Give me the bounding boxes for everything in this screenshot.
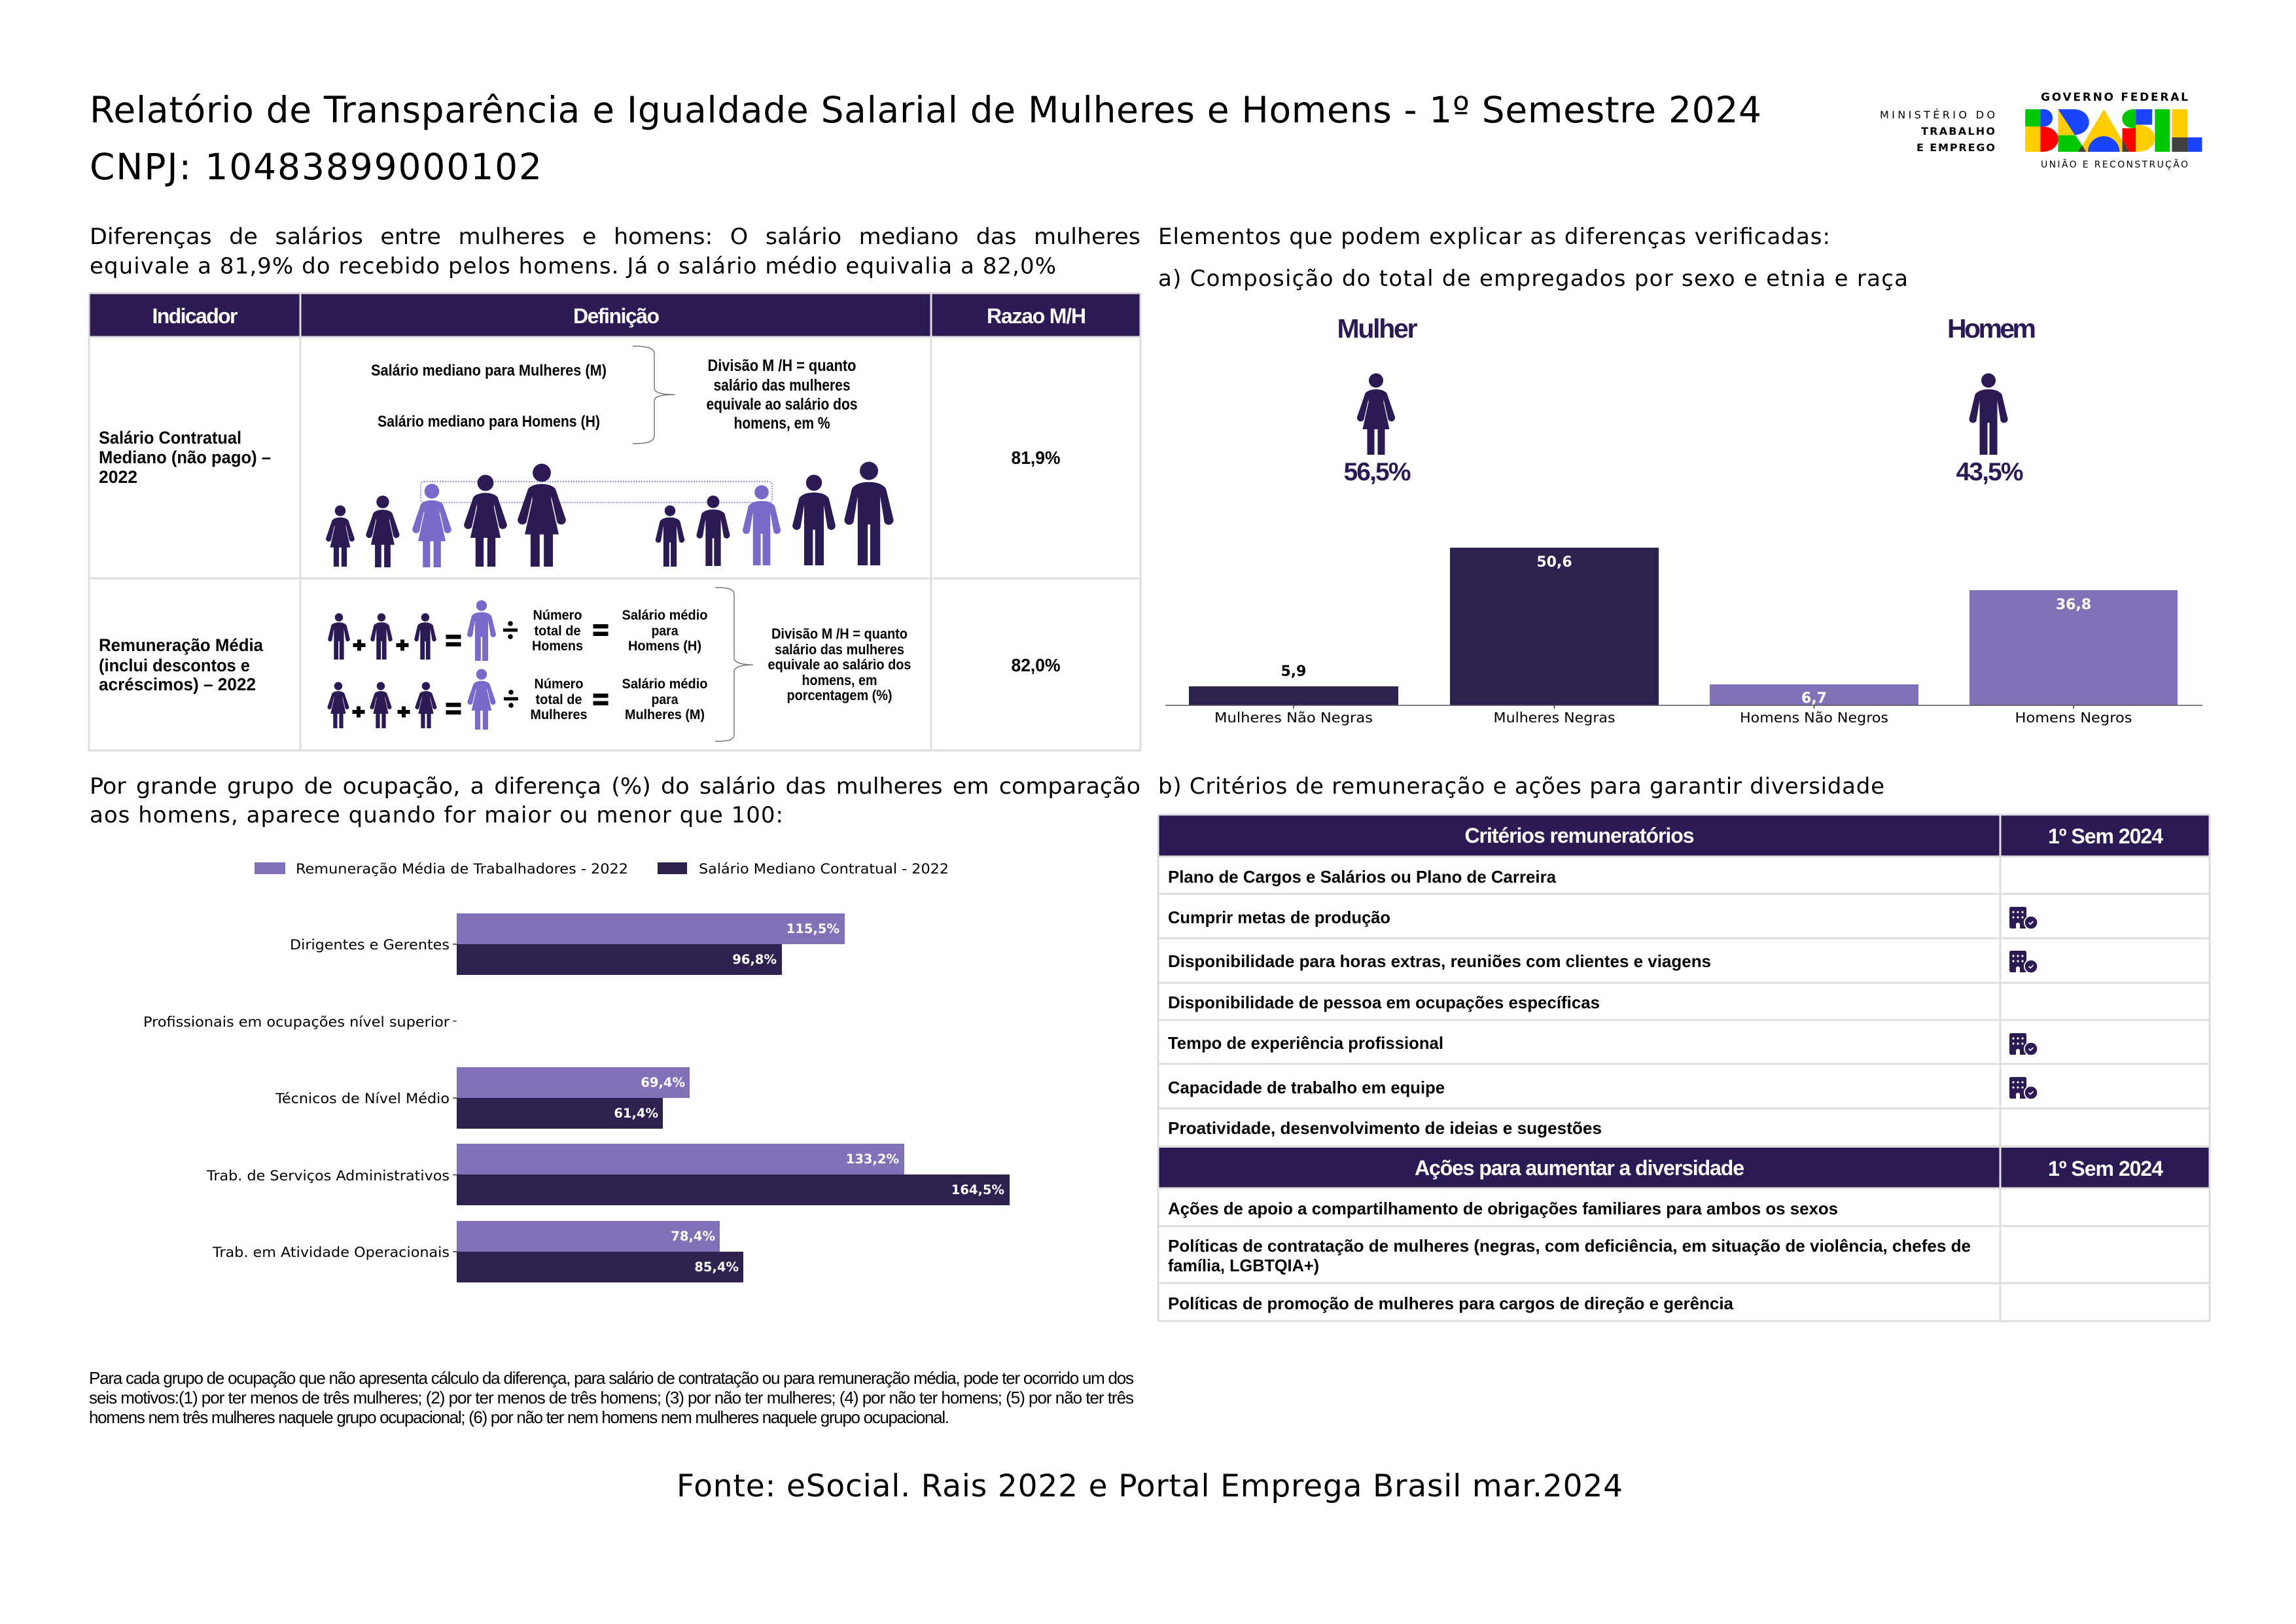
intro text: salary differences: Diferenças de salários entre mulheres e homens: O salário mediano das mulheres bbox=[90, 224, 1140, 250]
woman share: Mulher bbox=[1337, 313, 1418, 344]
bar chart: sex and race composition: Mulheres Não Negras bbox=[1214, 710, 1373, 726]
diversity header: Ações para aumentar a diversidade bbox=[1415, 1156, 1744, 1180]
heading: occupation group difference: aos homens, aparece quando for maior ou menor que 100: bbox=[90, 802, 783, 828]
table header: Definição bbox=[573, 304, 660, 328]
criteria list: Disponibilidade de pessoa em ocupações específicas bbox=[1168, 993, 1600, 1012]
diversity actions list bbox=[1168, 1199, 1971, 1313]
criteria list bbox=[1168, 867, 1711, 1138]
text: average division explanation: salário das mulheres bbox=[775, 641, 904, 658]
category labels: Trab. em Atividade Operacionais bbox=[212, 1244, 450, 1261]
row label: average remuneration: acréscimos) – 2022 bbox=[99, 675, 256, 694]
bar value labels: 61,4% bbox=[614, 1106, 658, 1121]
table header: Razao M/H bbox=[987, 304, 1086, 328]
diversity actions list: Políticas de contratação de mulheres (negras, com deficiência, em situação de violência, chefes de bbox=[1168, 1236, 1971, 1256]
row label: median contractual salary: 2022 bbox=[99, 467, 137, 487]
bar value labels: 85,4% bbox=[694, 1260, 739, 1275]
row label: median contractual salary: Salário Contratual bbox=[99, 428, 241, 448]
equation: women average: Mulheres (M) bbox=[625, 707, 705, 722]
row label: average remuneration bbox=[99, 635, 264, 694]
diversity actions list: Ações de apoio a compartilhamento de obrigações familiares para ambos os sexos bbox=[1168, 1199, 1838, 1218]
criteria header bbox=[1159, 815, 2209, 856]
equation: women average: Número bbox=[534, 677, 584, 692]
logo: Ministério do Trabalho e Emprego bbox=[1880, 109, 1995, 154]
text: median division explanation: homens, em % bbox=[734, 414, 830, 432]
table header bbox=[90, 294, 1140, 336]
icons: five men, median highlighted bbox=[656, 462, 894, 567]
equation: men average: Salário médio bbox=[622, 608, 708, 623]
title bbox=[90, 89, 1761, 188]
icon: building check, overtime availability bbox=[2009, 951, 2038, 974]
woman share: 56,5% bbox=[1344, 458, 1411, 486]
category labels: Técnicos de Nível Médio bbox=[275, 1091, 450, 1107]
text: median division explanation: equivale ao salário dos bbox=[707, 395, 857, 414]
logo: Governo Federal Brasil: GOVERNO FEDERAL bbox=[2041, 91, 2188, 104]
footnote: homens nem três mulheres naquele grupo ocupacional; (6) por não ter nem homens nem mulheres naquele grupo ocupacional. bbox=[89, 1407, 949, 1427]
icon: building check, experience bbox=[2009, 1033, 2038, 1056]
diversity header: 1º Sem 2024 bbox=[2048, 1157, 2163, 1180]
chart legend: Salário Mediano Contratual - 2022 bbox=[699, 861, 949, 877]
bar chart: sex and race composition: Mulheres Negras bbox=[1493, 710, 1615, 726]
text: average division explanation: Divisão M /H = quanto bbox=[771, 626, 908, 642]
title: CNPJ: 10483899000102 bbox=[90, 146, 542, 188]
equation: men average: para bbox=[652, 624, 679, 639]
footnote: Para cada grupo de ocupação que não apresenta cálculo da diferença, para salário de contratação ou para remuneração média, pode ter ocorrido um dos bbox=[89, 1368, 1134, 1388]
diversity header bbox=[1159, 1148, 2209, 1188]
equation: men average bbox=[328, 600, 707, 661]
row label: median contractual salary bbox=[99, 428, 271, 487]
equation: women average: para bbox=[652, 692, 679, 707]
heading: b) remuneration criteria: b) Critérios de remuneração e ações para garantir diversidade bbox=[1158, 773, 1884, 800]
icon: building check, production targets bbox=[2009, 907, 2038, 930]
bar chart: sex and race composition: 50,6 bbox=[1536, 554, 1572, 571]
bar chart: sex and race composition: 6,7 bbox=[1801, 690, 1827, 707]
intro text: salary differences bbox=[90, 224, 1140, 279]
panel: indicator table bbox=[89, 293, 1140, 750]
value: average ratio: 82,0% bbox=[1012, 655, 1061, 675]
criteria header: Critérios remuneratórios bbox=[1464, 824, 1695, 847]
chart legend: Remuneração Média de Trabalhadores - 2022 bbox=[296, 861, 628, 877]
equation: men average: Número bbox=[533, 608, 582, 623]
value: median ratio: 81,9% bbox=[1012, 448, 1061, 468]
bar value labels: 164,5% bbox=[951, 1182, 1004, 1197]
bar chart: sex and race composition: 5,9 bbox=[1281, 663, 1306, 680]
dotted link between median figures bbox=[421, 482, 772, 503]
equation: women average bbox=[327, 669, 708, 730]
man share: 43,5% bbox=[1956, 458, 2023, 486]
category labels: Trab. de Serviços Administrativos bbox=[206, 1168, 450, 1184]
equation: men average: Homens bbox=[532, 639, 583, 654]
man share: Homem bbox=[1947, 313, 2036, 344]
source line: Fonte: eSocial. Rais 2022 e Portal Emprega Brasil mar.2024 bbox=[677, 1468, 1623, 1504]
bar chart: sex and race composition bbox=[1165, 548, 2202, 726]
text: median division explanation: salário das mulheres bbox=[713, 376, 851, 395]
equation: men average: Homens (H) bbox=[628, 639, 701, 654]
equation: men average: total de bbox=[534, 624, 581, 639]
logo: Governo Federal Brasil bbox=[2025, 91, 2202, 170]
bar chart: sex and race composition: Homens Não Negros bbox=[1740, 710, 1888, 726]
intro text: salary differences: equivale a 81,9% do recebido pelos homens. Já o salário médio equivalia a 82,0% bbox=[90, 253, 1056, 279]
logo: Ministério do Trabalho e Emprego: MINISTÉRIO DO bbox=[1880, 109, 1995, 121]
icons: five women, median highlighted bbox=[326, 464, 566, 567]
row 1 definition labels: Salário mediano para Homens (H) bbox=[378, 413, 600, 431]
bar value labels: 78,4% bbox=[671, 1229, 715, 1244]
row 1 definition labels bbox=[371, 362, 607, 431]
equation: women average: total de bbox=[535, 692, 582, 707]
criteria header: 1º Sem 2024 bbox=[2048, 824, 2163, 848]
bars: average remuneration bbox=[457, 913, 904, 1252]
footnote: seis motivos:(1) por ter menos de três mulheres; (2) por ter menos de três homens; (3) por não ter mulheres; (4) por não ter homens; (5) por não ter três bbox=[89, 1388, 1134, 1407]
bar value labels: 69,4% bbox=[641, 1075, 685, 1090]
equation: women average: Salário médio bbox=[622, 677, 708, 692]
criteria list: Plano de Cargos e Salários ou Plano de Carreira bbox=[1168, 867, 1557, 887]
bars: median contractual salary bbox=[457, 944, 1010, 1282]
text: average division explanation: homens, em bbox=[802, 672, 877, 688]
footnote bbox=[89, 1368, 1134, 1427]
icon: building check, teamwork bbox=[2009, 1077, 2038, 1100]
bar value labels bbox=[614, 921, 1004, 1275]
panel: occupation bar chart bbox=[143, 861, 1010, 1282]
chart legend bbox=[255, 861, 949, 877]
brace: median salaries bbox=[633, 346, 675, 444]
bar value labels: 133,2% bbox=[846, 1152, 899, 1167]
bar value labels: 96,8% bbox=[732, 952, 777, 967]
heading: a) workforce composition: a) Composição do total de empregados por sexo e etnia e raça bbox=[1158, 266, 1908, 292]
row 1 definition labels: Salário mediano para Mulheres (M) bbox=[371, 362, 607, 380]
brace: average salaries bbox=[715, 588, 753, 741]
row label: median contractual salary: Mediano (não pago) – bbox=[99, 448, 271, 467]
panel: remuneration criteria table bbox=[1158, 815, 2210, 1321]
row label: average remuneration: Remuneração Média bbox=[99, 635, 264, 655]
criteria list: Disponibilidade para horas extras, reuniões com clientes e viagens bbox=[1168, 951, 1711, 971]
logo: Ministério do Trabalho e Emprego: E EMPREGO bbox=[1916, 141, 1995, 154]
bar chart: sex and race composition: 36,8 bbox=[2056, 597, 2091, 613]
logo: Ministério do Trabalho e Emprego: TRABALHO bbox=[1921, 125, 1995, 137]
bar value labels: 115,5% bbox=[786, 921, 839, 936]
text: median division explanation bbox=[707, 357, 857, 432]
text: average division explanation: equivale ao salário dos bbox=[768, 656, 911, 673]
heading: explanatory elements: Elementos que podem explicar as diferenças verificadas: bbox=[1158, 224, 1830, 250]
diversity actions list: família, LGBTQIA+) bbox=[1168, 1256, 1319, 1275]
table header: Indicador bbox=[152, 304, 238, 328]
diversity actions list: Políticas de promoção de mulheres para cargos de direção e gerência bbox=[1168, 1294, 1734, 1313]
title: Relatório de Transparência e Igualdade Salarial de Mulheres e Homens - 1º Semestre 2024 bbox=[90, 89, 1761, 131]
man share bbox=[1947, 313, 2036, 486]
text: average division explanation bbox=[768, 626, 911, 703]
panel: gender composition bbox=[1165, 313, 2202, 726]
category labels: Dirigentes e Gerentes bbox=[290, 937, 450, 953]
criteria list: Proatividade, desenvolvimento de ideias e sugestões bbox=[1168, 1118, 1602, 1138]
criteria list: Cumprir metas de produção bbox=[1168, 908, 1390, 927]
category labels bbox=[143, 937, 450, 1261]
text: average division explanation: porcentagem (%) bbox=[786, 687, 892, 703]
category labels: Profissionais em ocupações nível superior bbox=[143, 1014, 450, 1031]
woman share bbox=[1337, 313, 1418, 486]
row label: average remuneration: (inclui descontos e bbox=[99, 656, 250, 675]
criteria list: Tempo de experiência profissional bbox=[1168, 1033, 1443, 1053]
bar chart: sex and race composition: Homens Negros bbox=[2015, 710, 2132, 726]
equation: women average: Mulheres bbox=[530, 707, 588, 722]
heading: occupation group difference bbox=[90, 773, 1140, 828]
heading: occupation group difference: Por grande grupo de ocupação, a diferença (%) do salário das mulheres em comparação bbox=[90, 773, 1140, 800]
criteria list: Capacidade de trabalho em equipe bbox=[1168, 1078, 1445, 1097]
logo: Governo Federal Brasil: UNIÃO E RECONSTRUÇÃO bbox=[2041, 159, 2188, 170]
text: median division explanation: Divisão M /H = quanto bbox=[708, 357, 856, 375]
